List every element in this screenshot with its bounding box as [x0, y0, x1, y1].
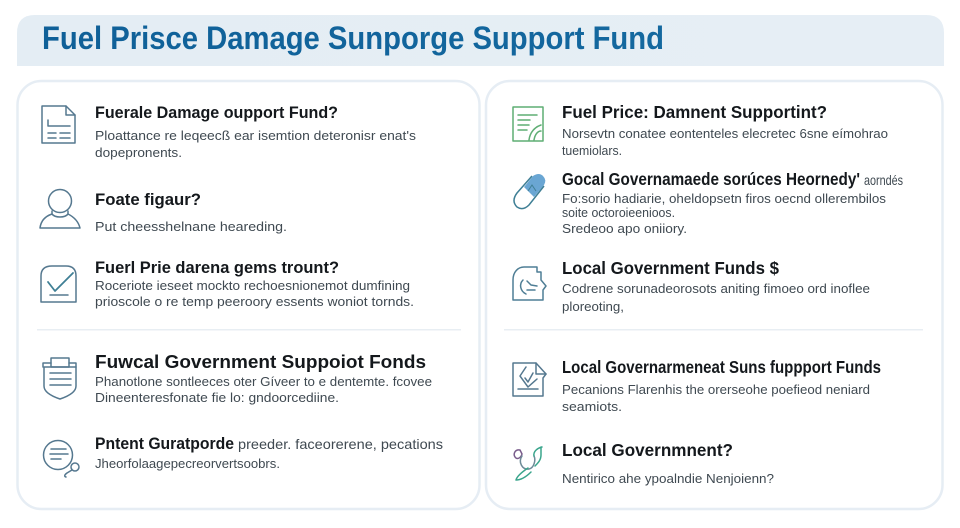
title: Fuel Prisce Damage Sunporge Support Fund: [42, 20, 664, 56]
item text: local government description: Nentirico ahe ypoalndie Nenjoienn?: [562, 471, 774, 486]
item text: support funds description: seamiots.: [562, 399, 622, 414]
item heading: patent guidance: preeder. faceorerene, pecations: [238, 436, 443, 452]
item text: fuel price description: Norsevtn conatee eontenteles elecretec 6sne eímohrao: [562, 126, 888, 141]
item text: services description: soite octoroieenioos.: [562, 205, 675, 220]
item text: amount description: [95, 278, 414, 309]
item text: local funds description: ploreoting,: [562, 299, 624, 314]
item heading: local government services: aorndés: [864, 172, 903, 188]
panel: left: [18, 81, 480, 509]
item heading: figure question: Foate figaur?: [95, 190, 201, 209]
item text: government funds description: Phanotlone sontleeces oter Gíveer to e dentemte. fcovee: [95, 374, 432, 389]
item heading: support funds: Local Governarmeneat Suns fuppport Funds: [562, 357, 881, 377]
panel: right: [486, 81, 942, 509]
item heading: government funds: Fuwcal Government Suppoiot Fonds: [95, 351, 426, 372]
item heading: fuel price support: Fuel Price: Damnent Supportint?: [562, 102, 827, 122]
icon: checkbox: [41, 266, 76, 302]
item text: government funds description: Dineenteresfonate fie lo: gndoorcediine.: [95, 390, 339, 405]
item text: services description: Sredeoo apo oniiory.: [562, 221, 687, 236]
icon: document: [42, 106, 75, 143]
item heading: patent guidance: [95, 434, 443, 453]
item text: fuel price description: [562, 126, 888, 158]
item text: amount description: Roceriote ieseet mockto rechoesnionemot dumfining: [95, 278, 410, 293]
icon: capsule: [514, 174, 545, 209]
item text: figure description: Put cheesshelnane heareding.: [95, 219, 287, 234]
item text: funding description: dopepronents.: [95, 145, 182, 160]
header band: [17, 15, 944, 66]
item text: government funds description: [95, 374, 432, 405]
icon: house: [513, 267, 546, 300]
icon: clipboard shield: [43, 358, 76, 399]
item heading: local government services: Gocal Governamaede sorúces Heornedy': [562, 169, 860, 189]
item text: support funds description: Pecanions Flarenhis the orerseohe poefieod neniard: [562, 382, 870, 397]
item heading: local government funds: Local Government Funds $: [562, 258, 779, 278]
item text: services description: [562, 191, 887, 236]
item text: support funds description: [562, 382, 870, 414]
item text: funding description: Ploattance re leqeecß ear isemtion deteronisr enat's: [95, 128, 417, 143]
item heading: patent guidance: Pntent Guratporde: [95, 434, 234, 453]
item heading: local government question: Local Governmnent?: [562, 440, 733, 460]
item heading: amount question: Fuerl Prie darena gems trount?: [95, 258, 339, 277]
icon: green document: [513, 107, 543, 141]
icon: certificate: [513, 363, 546, 396]
item text: patent description: Jheorfolaagepecreorvertsoobrs.: [95, 456, 280, 471]
item text: funding description: [95, 128, 417, 160]
icon: plant: [514, 447, 542, 480]
item text: local funds description: [562, 281, 870, 314]
icon: person: [40, 190, 80, 228]
item heading: funding question: Fuerale Damage oupport Fund?: [95, 103, 338, 122]
item text: local funds description: Codrene sorunadeorosots aniting fimoeo ord inoflee: [562, 281, 870, 296]
item text: fuel price description: tuemiolars.: [562, 143, 622, 158]
item text: services description: Fo:sorio hadiarie, oheldopsetn firos oecnd ollerembilos: [562, 191, 887, 206]
item text: amount description: prioscole o re temp peeroory essents woniot tornds.: [95, 294, 414, 309]
icon: speech circle: [44, 440, 79, 477]
